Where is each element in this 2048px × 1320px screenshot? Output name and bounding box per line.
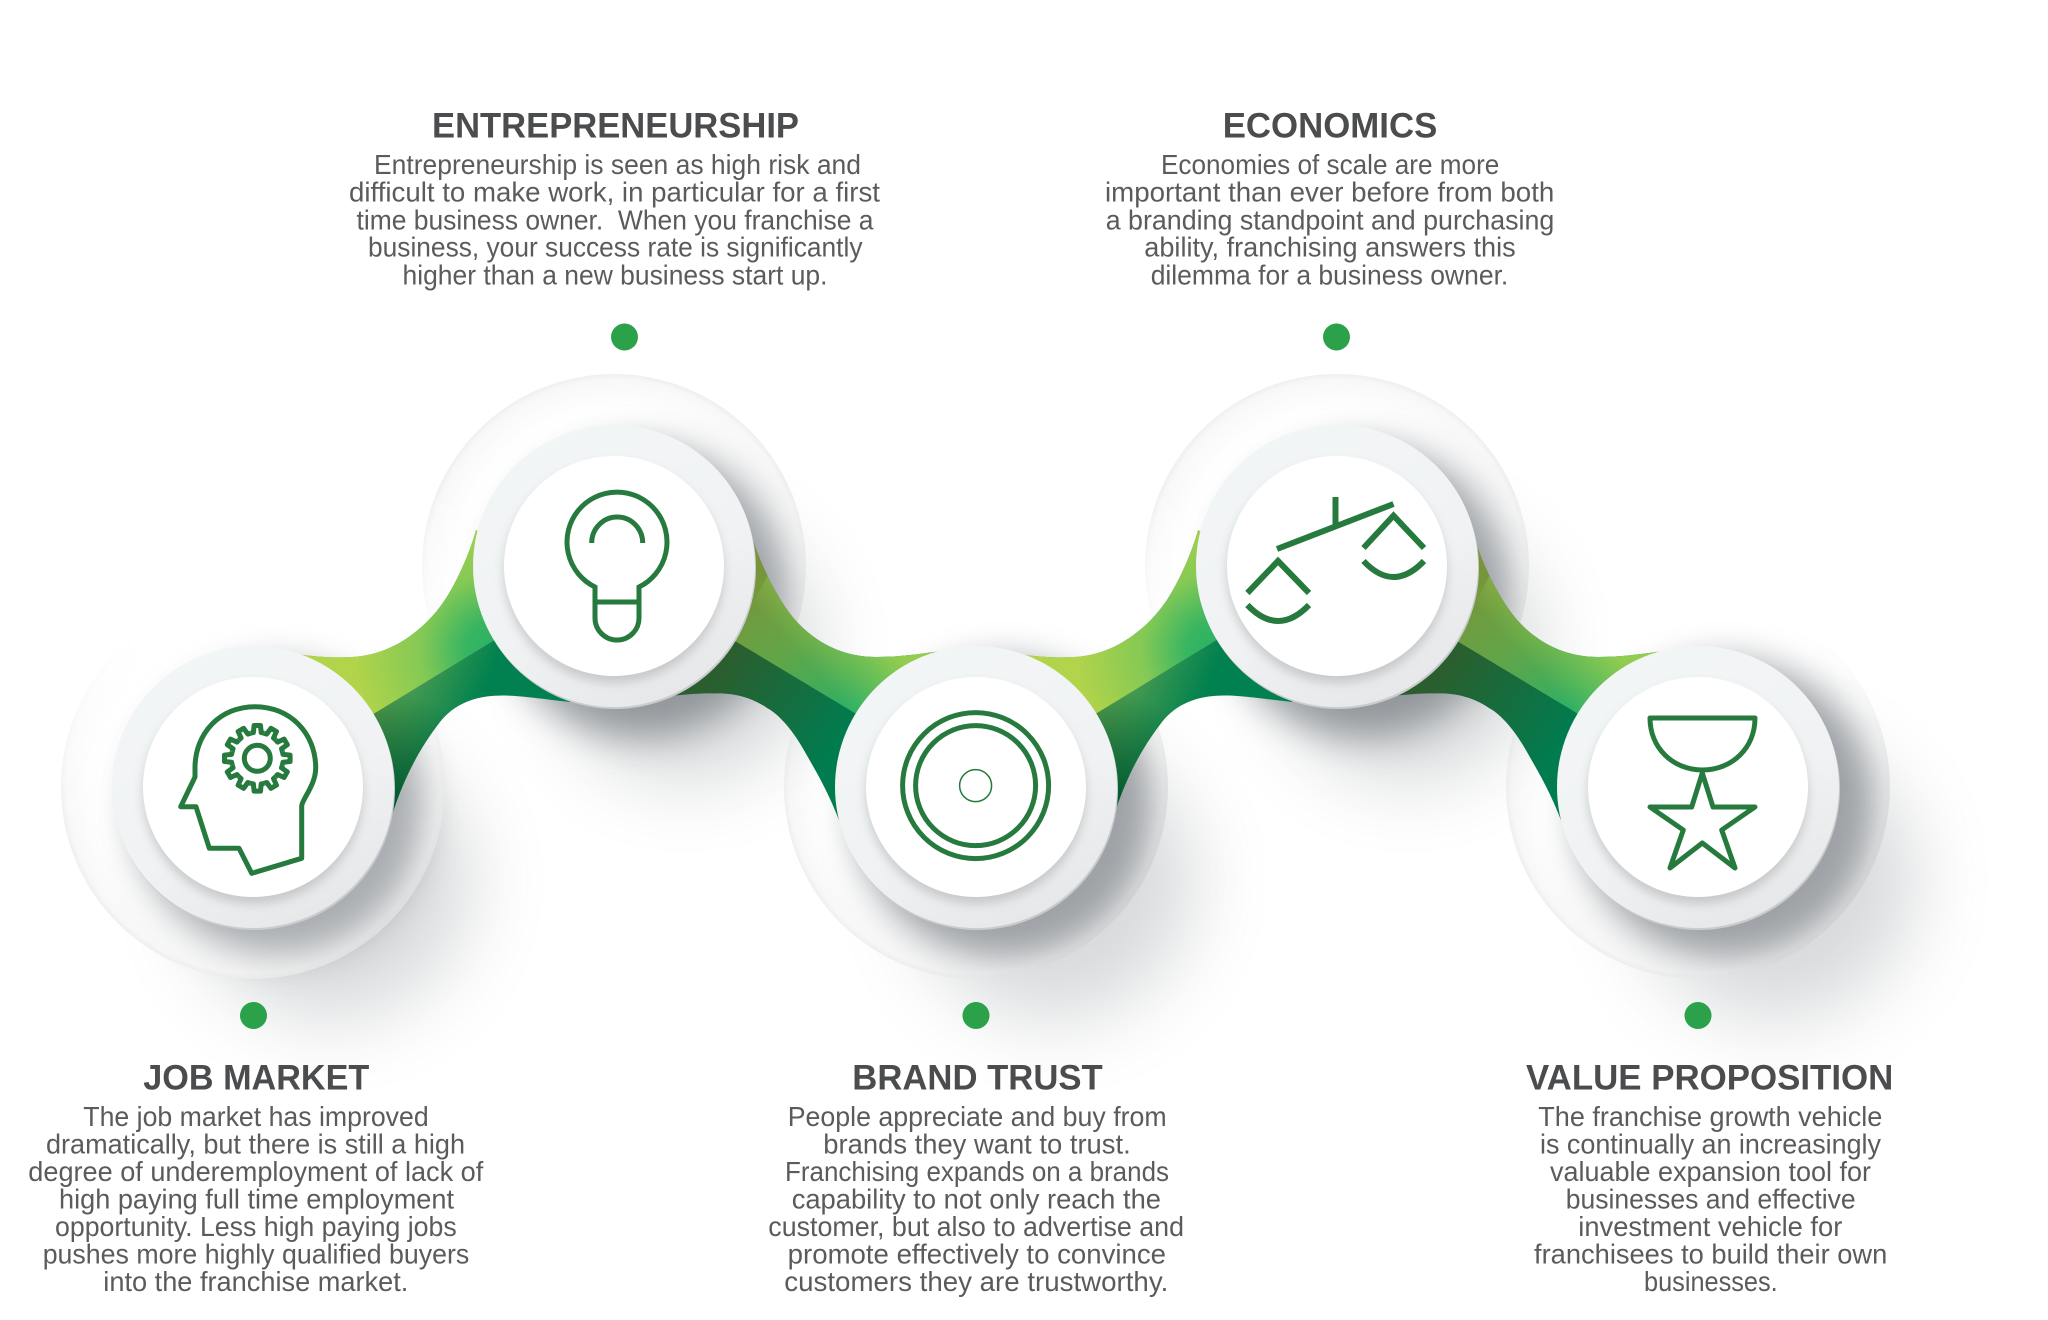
body: entrepreneurship: difficult to make work, in particular for a first	[349, 177, 880, 208]
disc: value proposition	[1557, 646, 1840, 930]
body: brand trust: People appreciate and buy from	[788, 1101, 1167, 1132]
body: economics: Economies of scale are more	[1161, 149, 1499, 180]
body: job market: into the franchise market.	[103, 1266, 408, 1297]
body: value proposition: investment vehicle for	[1578, 1211, 1842, 1242]
panel: value proposition text	[1526, 1057, 1893, 1297]
ribbon: brand trust to economics	[1024, 530, 1292, 808]
heading: job market: JOB MARKET	[143, 1057, 370, 1097]
body: brand trust: capability to not only reach the	[792, 1183, 1161, 1214]
body: entrepreneurship: Entrepreneurship is seen as high risk and	[374, 149, 861, 180]
icon: balance scales	[1247, 497, 1424, 621]
body: value proposition: franchisees to build their own	[1534, 1238, 1887, 1269]
body: brand trust: customer, but also to advertise and	[768, 1211, 1184, 1242]
body: entrepreneurship: business, your success rate is significantly	[368, 232, 863, 263]
ribbon: entrepreneurship to brand trust	[674, 540, 937, 822]
body: job market: opportunity. Less high paying jobs	[55, 1211, 457, 1242]
body: economics: ability, franchising answers this	[1144, 232, 1516, 263]
halo and shadow: brand trust	[784, 595, 1193, 1020]
body: brand trust	[768, 1101, 1184, 1297]
heading: brand trust: BRAND TRUST	[852, 1057, 1103, 1097]
dot: economics	[1323, 324, 1350, 350]
body: value proposition: The franchise growth vehicle	[1538, 1101, 1882, 1132]
heading: economics: ECONOMICS	[1223, 105, 1437, 145]
body: brand trust: Franchising expands on a brands	[785, 1156, 1169, 1187]
heading: value proposition: VALUE PROPOSITION	[1526, 1057, 1893, 1097]
halo and shadow: value proposition	[1506, 595, 1915, 1020]
body: brand trust: brands they want to trust.	[823, 1128, 1131, 1159]
body: economics: dilemma for a business owner.	[1151, 259, 1508, 290]
body: entrepreneurship	[349, 149, 880, 290]
body: economics	[1105, 149, 1554, 290]
body: value proposition: is continually an increasingly	[1540, 1128, 1881, 1159]
panel: brand trust text	[768, 1057, 1184, 1297]
body: economics: important than ever before from both	[1105, 177, 1554, 208]
body: job market: high paying full time employment	[59, 1183, 454, 1214]
body: economics: a branding standpoint and purchasing	[1106, 204, 1554, 235]
dot: value proposition	[1684, 1002, 1712, 1029]
panel: entrepreneurship text	[349, 105, 880, 290]
halo and shadow: entrepreneurship	[422, 374, 815, 780]
dot: job market	[240, 1002, 267, 1029]
dot: entrepreneurship	[611, 324, 638, 350]
body: job market	[28, 1101, 484, 1297]
disc: job market	[112, 646, 395, 930]
body: entrepreneurship: higher than a new business start up.	[402, 259, 828, 290]
body: job market: pushes more highly qualified buyers	[43, 1238, 469, 1269]
icon: trophy star	[1650, 718, 1755, 868]
body: value proposition: businesses.	[1644, 1266, 1778, 1297]
disc: entrepreneurship	[473, 425, 756, 709]
ribbon: job market to entrepreneurship	[301, 530, 570, 814]
body: value proposition: businesses and effective	[1566, 1183, 1856, 1214]
halo and shadow: job market	[61, 595, 470, 1020]
icon: light bulb	[567, 492, 667, 640]
ribbon: economics to value proposition	[1398, 546, 1659, 822]
disc: economics	[1196, 425, 1479, 709]
panel: job market text	[28, 1057, 484, 1297]
body: entrepreneurship: time business owner. When you franchise a	[356, 204, 874, 235]
icon: target rings	[903, 713, 1049, 859]
icon: head with gear	[181, 707, 316, 873]
body: job market: The job market has improved	[83, 1101, 429, 1132]
body: job market: dramatically, but there is still a high	[46, 1128, 465, 1159]
halo and shadow: economics	[1145, 374, 1538, 780]
panel: economics text	[1105, 105, 1554, 290]
body: job market: degree of underemployment of lack of	[28, 1156, 484, 1187]
body: brand trust: customers they are trustworthy.	[784, 1266, 1168, 1297]
body: value proposition	[1534, 1101, 1887, 1297]
dot: brand trust	[962, 1002, 990, 1029]
heading: entrepreneurship: ENTREPRENEURSHIP	[432, 105, 799, 145]
body: value proposition: valuable expansion tool for	[1550, 1156, 1871, 1187]
disc: brand trust	[835, 646, 1118, 930]
body: brand trust: promote effectively to convince	[788, 1238, 1166, 1269]
